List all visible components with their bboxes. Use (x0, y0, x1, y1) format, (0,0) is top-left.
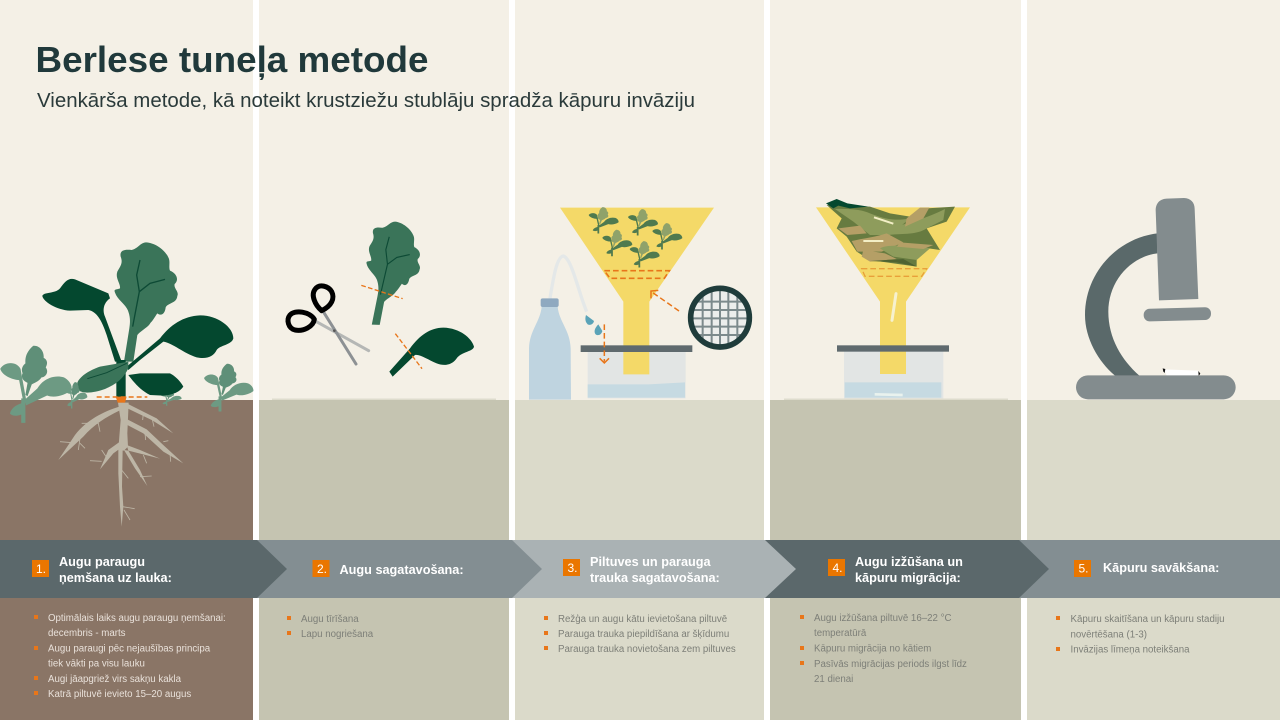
arrow: step 3 (510, 540, 796, 598)
leaf: dark right (127, 315, 233, 370)
step 3 header: 3. (568, 561, 578, 575)
plant sprigs (589, 207, 682, 268)
step 5 list (1056, 614, 1225, 656)
microscope tube (1156, 198, 1198, 300)
microscope arm (1085, 233, 1157, 376)
process band (0, 540, 1280, 598)
subtitle: Vienkārša metode, kā noteikt krustziežu stublāju spradža kāpuru invāziju (37, 90, 695, 112)
leaf vein (133, 260, 165, 327)
icon: scissors (288, 286, 369, 364)
step 1 header (32, 555, 172, 585)
step 1 list: Augu paraugi pēc nejaušības principa (48, 644, 211, 654)
panel: step 3 background (515, 0, 764, 720)
cut line 1 (361, 285, 403, 299)
illustration: drying funnel (816, 199, 970, 398)
leaf: dark left (42, 279, 122, 362)
cut line (97, 395, 147, 399)
mesh position dashed outline (862, 269, 927, 276)
microscope base (1076, 375, 1236, 399)
step 2 list: Augu tīrīšana (301, 614, 359, 625)
step 1 list: Optimālais laiks augu paraugu ņemšanai: (48, 613, 226, 624)
step 2 list (287, 614, 374, 640)
panel: step 5 background (1027, 0, 1280, 720)
step 2 header: 2. (317, 562, 327, 576)
cut point collar (116, 397, 127, 403)
step 4 list (800, 613, 967, 685)
step 4 list: Kāpuru migrācija no kātiem (814, 644, 931, 654)
illustration: funnel setup (529, 207, 749, 400)
beaker (588, 352, 686, 398)
mesh position dashed outline (604, 271, 669, 278)
step 4 header: kāpuru migrācija: (855, 571, 961, 585)
panel: step 1 background (0, 0, 253, 720)
step 5 list: novērtēšana (1-3) (1070, 630, 1147, 640)
roots (58, 403, 183, 527)
step 3 header: Piltuves un parauga (590, 555, 712, 569)
step 2 header (312, 560, 464, 577)
arrow: step 1 (0, 540, 287, 598)
funnel (816, 207, 970, 374)
step 1 list: Katrā piltuvē ievieto 15–20 augus (48, 689, 191, 700)
step 1 header: ņemšana uz lauka: (59, 571, 172, 585)
step 1 header: 1. (36, 562, 46, 576)
larva in water (875, 390, 903, 399)
beaker (844, 351, 943, 398)
illustration: scissors and cut leaves (288, 221, 474, 377)
drying leaves pile (826, 199, 955, 267)
step 2 header: Augu sagatavošana: (340, 563, 464, 577)
step 5 header (1074, 560, 1219, 577)
microscope stage (1144, 307, 1211, 322)
step 4 list: Pasīvās migrācijas periods ilgst līdz (814, 659, 967, 670)
icon: side plants (0, 346, 253, 423)
beaker lid (581, 345, 692, 352)
icon: mesh (691, 288, 749, 347)
step 1 list: Augi jāapgriež virs sakņu kakla (48, 674, 182, 685)
step 5 header: Kāpuru savākšana: (1103, 561, 1219, 575)
step 4 list: temperatūrā (814, 628, 867, 639)
larva on slide (1163, 368, 1200, 376)
funnel (560, 208, 714, 374)
leaf: lower left (77, 362, 128, 393)
arrow: liquid to beaker (600, 324, 609, 363)
water drops (585, 315, 602, 335)
arrow: mesh to funnel (651, 290, 679, 311)
step 4 list: 21 dienai (814, 674, 853, 685)
leaf vein (87, 363, 127, 379)
step 2 list: Lapu nogriešana (301, 629, 374, 640)
leaf: green (364, 221, 422, 327)
step 3 header (563, 555, 720, 585)
arrow: step 2 (255, 540, 542, 598)
step 1 list (34, 613, 226, 700)
arrow: step 4 (763, 540, 1049, 598)
larva in funnel tube (892, 294, 896, 320)
step 3 list: Parauga trauka novietošana zem piltuves (558, 644, 736, 655)
step 5 list: Invāzijas līmeņa noteikšana (1070, 644, 1190, 656)
panel: step 2 background (259, 0, 509, 720)
arrow: step 5 (1017, 540, 1280, 598)
illustration: plant with roots (0, 242, 253, 527)
bottle (529, 298, 571, 400)
leaf: dark lower right (128, 373, 183, 396)
step 3 list: Režģa un augu kātu ievietošana piltuvē (558, 614, 727, 625)
leaf: centre (115, 242, 178, 362)
step 3 header: trauka sagatavošana: (590, 571, 720, 585)
step 1 list: decembris - marts (48, 628, 126, 639)
step 4 header (828, 555, 963, 585)
title: Berlese tuneļa metode (36, 39, 429, 80)
panel: step 4 background (770, 0, 1021, 720)
leaf: dark (389, 328, 474, 377)
illustration: microscope (1076, 198, 1236, 399)
step 1 list: tiek vākti pa visu lauku (48, 658, 145, 670)
step 5 header: 5. (1078, 562, 1089, 576)
step 1 header: Augu paraugu (59, 555, 145, 569)
beaker lid (837, 345, 949, 352)
bottle tube (550, 256, 587, 312)
step 3 list (544, 614, 736, 655)
step 4 header: 4. (832, 561, 843, 575)
step 3 list: Parauga trauka piepildīšana ar šķīdumu (558, 629, 729, 640)
step 4 header: Augu izžūšana un (855, 555, 963, 569)
step 5 list: Kāpuru skaitīšana un kāpuru stadiju (1070, 614, 1225, 625)
cut line 2 (395, 334, 422, 369)
stem (116, 360, 126, 397)
step 4 list: Augu izžūšana piltuvē 16–22 °C (814, 613, 951, 624)
